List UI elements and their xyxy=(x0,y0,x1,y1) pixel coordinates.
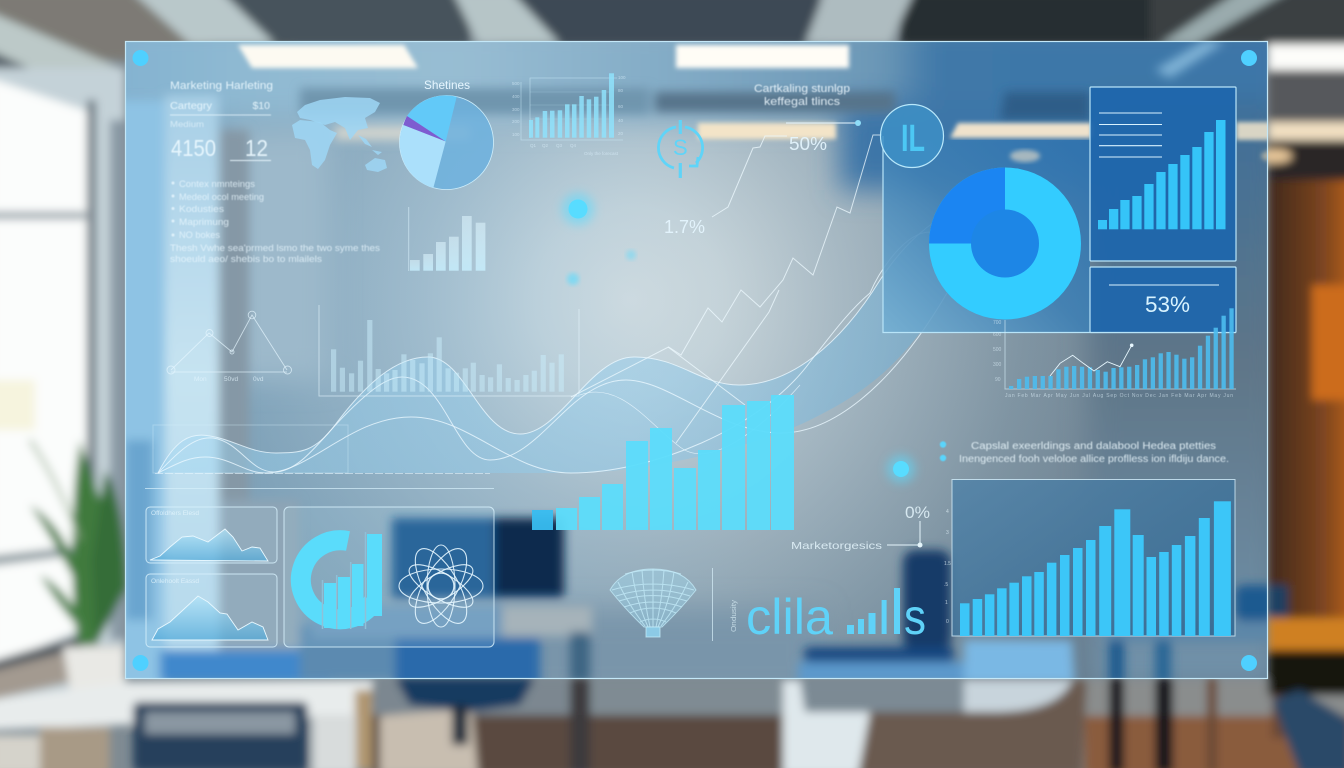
glass panel interior xyxy=(126,42,1267,678)
glowing accent dots xyxy=(562,193,915,483)
panel: right donut block xyxy=(880,104,1236,332)
callout: 0 percent marketing label: 0% xyxy=(905,503,930,522)
glass border xyxy=(126,42,1268,678)
left text block: marketing summary: Kodusties xyxy=(179,204,224,215)
left window xyxy=(0,68,125,708)
small triangle line chart: 50vd xyxy=(224,376,238,383)
callout: 50 percent xyxy=(786,120,861,154)
small triangle line chart: Mon xyxy=(194,376,207,383)
panel: small area chart 1 xyxy=(146,507,277,563)
top mini bar chart: 80 xyxy=(618,88,624,93)
heading: pie chart: Shetines xyxy=(424,78,470,92)
top mini bar chart: Q4 xyxy=(570,143,577,148)
left text block: marketing summary: Thesh Vwhe sea'prmed lsmo the two syme thes xyxy=(170,243,380,254)
brand word with small bars xyxy=(731,588,926,645)
top mini bar chart: Q1 xyxy=(530,143,537,148)
brand word with small bars: clila xyxy=(746,589,833,645)
centre furniture and floor xyxy=(372,678,792,768)
plant xyxy=(30,440,125,645)
lower right mixed bar and line chart: 300 xyxy=(993,362,1002,368)
right table legs xyxy=(1109,678,1286,768)
top mini bar chart: 300 xyxy=(512,107,520,112)
top mini bar chart: Only the forecast xyxy=(584,151,619,156)
panel: main centre bar chart xyxy=(532,395,794,530)
panel: bottom right bar chart: 0 xyxy=(946,619,949,625)
panel: bottom right bar chart: 1.5 xyxy=(944,561,951,567)
top mini bar chart: Q3 xyxy=(556,143,563,148)
top mini bar chart: 20 xyxy=(618,131,624,136)
panel: 53 percent stat xyxy=(1090,267,1236,332)
lower right mixed bar and line chart: Jan Feb Mar Apr May Jun Jul Aug Sep Oct Nov Dec Jan Feb Mar Apr May Jun xyxy=(1005,393,1233,399)
panel: bottom right bar chart: .5 xyxy=(944,582,948,588)
top mini bar chart: 200 xyxy=(512,119,520,124)
small triangle line chart: 0vd xyxy=(253,376,264,383)
left text block: marketing summary: $10 xyxy=(252,100,270,112)
heading: centre strategy text: Cartkaling stunlgp xyxy=(754,83,850,95)
callout: 0 percent marketing label: Marketorgesics xyxy=(791,540,882,552)
heading: centre strategy text xyxy=(754,83,850,108)
top mini bar chart: Q2 xyxy=(542,143,549,148)
panel: gauge and atom card xyxy=(284,507,494,647)
lower right mixed bar and line chart: 600 xyxy=(993,332,1002,338)
icon: hot air balloon xyxy=(610,569,696,637)
ceiling and beams xyxy=(0,0,1344,125)
rising jagged trend lines xyxy=(571,135,882,443)
text block: right bullets xyxy=(940,441,1229,465)
panel: bottom right bar chart: 1 xyxy=(945,600,948,606)
pie chart xyxy=(400,95,494,190)
icon: IL badge xyxy=(880,104,944,168)
mid mini bar chart xyxy=(409,207,485,271)
brand word with small bars: s xyxy=(904,589,926,645)
icon: atom xyxy=(399,541,483,631)
icon: gauge with bars xyxy=(301,532,382,629)
left text block: marketing summary: 12 xyxy=(245,135,268,161)
left text block: marketing summary: Marketing Harleting xyxy=(170,80,273,92)
top mini bar chart xyxy=(512,73,626,156)
left text block: marketing summary: 4150 xyxy=(171,135,216,161)
corner dots xyxy=(132,50,1257,671)
callout: 0 percent marketing label xyxy=(791,503,930,552)
left text block: marketing summary: Medium xyxy=(170,119,204,129)
left text block: marketing summary: shoeuld aeo/ shebis bo to mlailels xyxy=(170,254,322,265)
left text block: marketing summary: Contex nmnteings xyxy=(179,179,255,190)
text block: right bullets: Inengenced fooh veloloe allice proflless ion ifldiju dance. xyxy=(959,454,1229,465)
callout: 50 percent: 50% xyxy=(789,134,827,154)
lower right mixed bar and line chart xyxy=(993,308,1236,399)
panel: small area chart 1: Offoldhers Elesd xyxy=(151,511,199,517)
pale wide bar chart xyxy=(319,305,579,396)
icon: dollar cycle: S xyxy=(673,135,688,160)
top mini bar chart: 60 xyxy=(618,104,624,109)
left text block: marketing summary: Medeol ocol meeting xyxy=(179,192,264,203)
small triangle line chart xyxy=(167,311,292,383)
left text block: marketing summary: Cartegry xyxy=(170,100,213,112)
top mini bar chart: 100 xyxy=(618,75,626,80)
left text block: marketing summary: NO bokes xyxy=(179,230,220,241)
lower right mixed bar and line chart: 700 xyxy=(993,320,1002,326)
vertical divider xyxy=(712,568,713,641)
left text block: marketing summary xyxy=(170,80,380,265)
desk and chair left xyxy=(0,680,375,768)
top mini bar chart: 400 xyxy=(512,94,520,99)
divider line xyxy=(145,488,494,489)
top mini bar chart: 40 xyxy=(618,118,624,123)
donut chart xyxy=(929,168,1081,320)
heading: centre strategy text: keffegal tlincs xyxy=(764,96,841,108)
right wall xyxy=(1258,44,1344,768)
brand word with small bars: Ondusity xyxy=(731,599,738,632)
callout: 1.7 percent: 1.7% xyxy=(664,217,705,237)
left text block: marketing summary: Maprimung xyxy=(179,217,229,228)
armchair xyxy=(783,680,1344,768)
panel: 53 percent stat: 53% xyxy=(1145,292,1190,317)
plant pot xyxy=(63,647,125,701)
ceiling light reflections xyxy=(238,45,1291,162)
panel: bottom right bar chart: 3 xyxy=(946,530,949,536)
panel: text and rising bars xyxy=(1090,87,1236,261)
icon: dollar cycle xyxy=(658,120,703,178)
lower right mixed bar and line chart: 90 xyxy=(995,377,1001,383)
panel: bottom right bar chart xyxy=(944,480,1235,636)
panel: small area chart 2 xyxy=(146,574,277,647)
icon: world map xyxy=(292,97,387,172)
icon: IL badge: IL xyxy=(901,118,925,160)
panel: bottom right bar chart: 4 xyxy=(946,509,949,515)
panel: small area chart 2: Onlehoolt Eassd xyxy=(151,579,199,585)
wave ribbon chart xyxy=(153,215,947,474)
lower right mixed bar and line chart: 500 xyxy=(993,347,1002,353)
text block: right bullets: Capslal exeerldings and dalabool Hedea ptetties xyxy=(971,441,1216,452)
top mini bar chart: 500 xyxy=(512,81,520,86)
top mini bar chart: 100 xyxy=(512,132,520,137)
